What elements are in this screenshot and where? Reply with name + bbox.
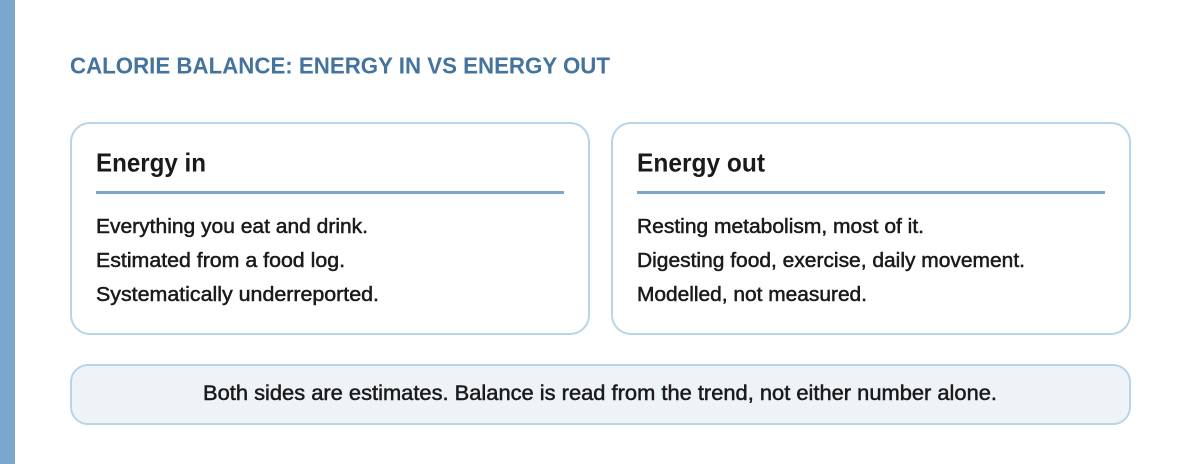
text block: energy in details: Everything you eat and drink.	[96, 216, 368, 238]
text block: energy out details	[637, 216, 1025, 306]
title: CALORIE BALANCE: ENERGY IN VS ENERGY OUT	[70, 52, 610, 78]
callout	[71, 365, 1130, 424]
text block: energy in details: Systematically underreported.	[96, 284, 379, 306]
panel: energy in	[71, 123, 589, 334]
callout: Both sides are estimates. Balance is read from the trend, not either number alone.	[203, 382, 997, 405]
text block: energy in details: Estimated from a food log.	[96, 250, 345, 272]
text block: energy out details: Resting metabolism, most of it.	[637, 216, 924, 238]
text block: energy out details: Digesting food, exercise, daily movement.	[637, 250, 1025, 272]
heading: energy in: Energy in	[96, 148, 206, 178]
heading: energy out: Energy out	[637, 148, 765, 178]
text block: energy out details: Modelled, not measured.	[637, 284, 867, 306]
panel: energy out	[612, 123, 1130, 334]
text block: energy in details	[96, 216, 379, 306]
accent side bar	[0, 0, 15, 464]
